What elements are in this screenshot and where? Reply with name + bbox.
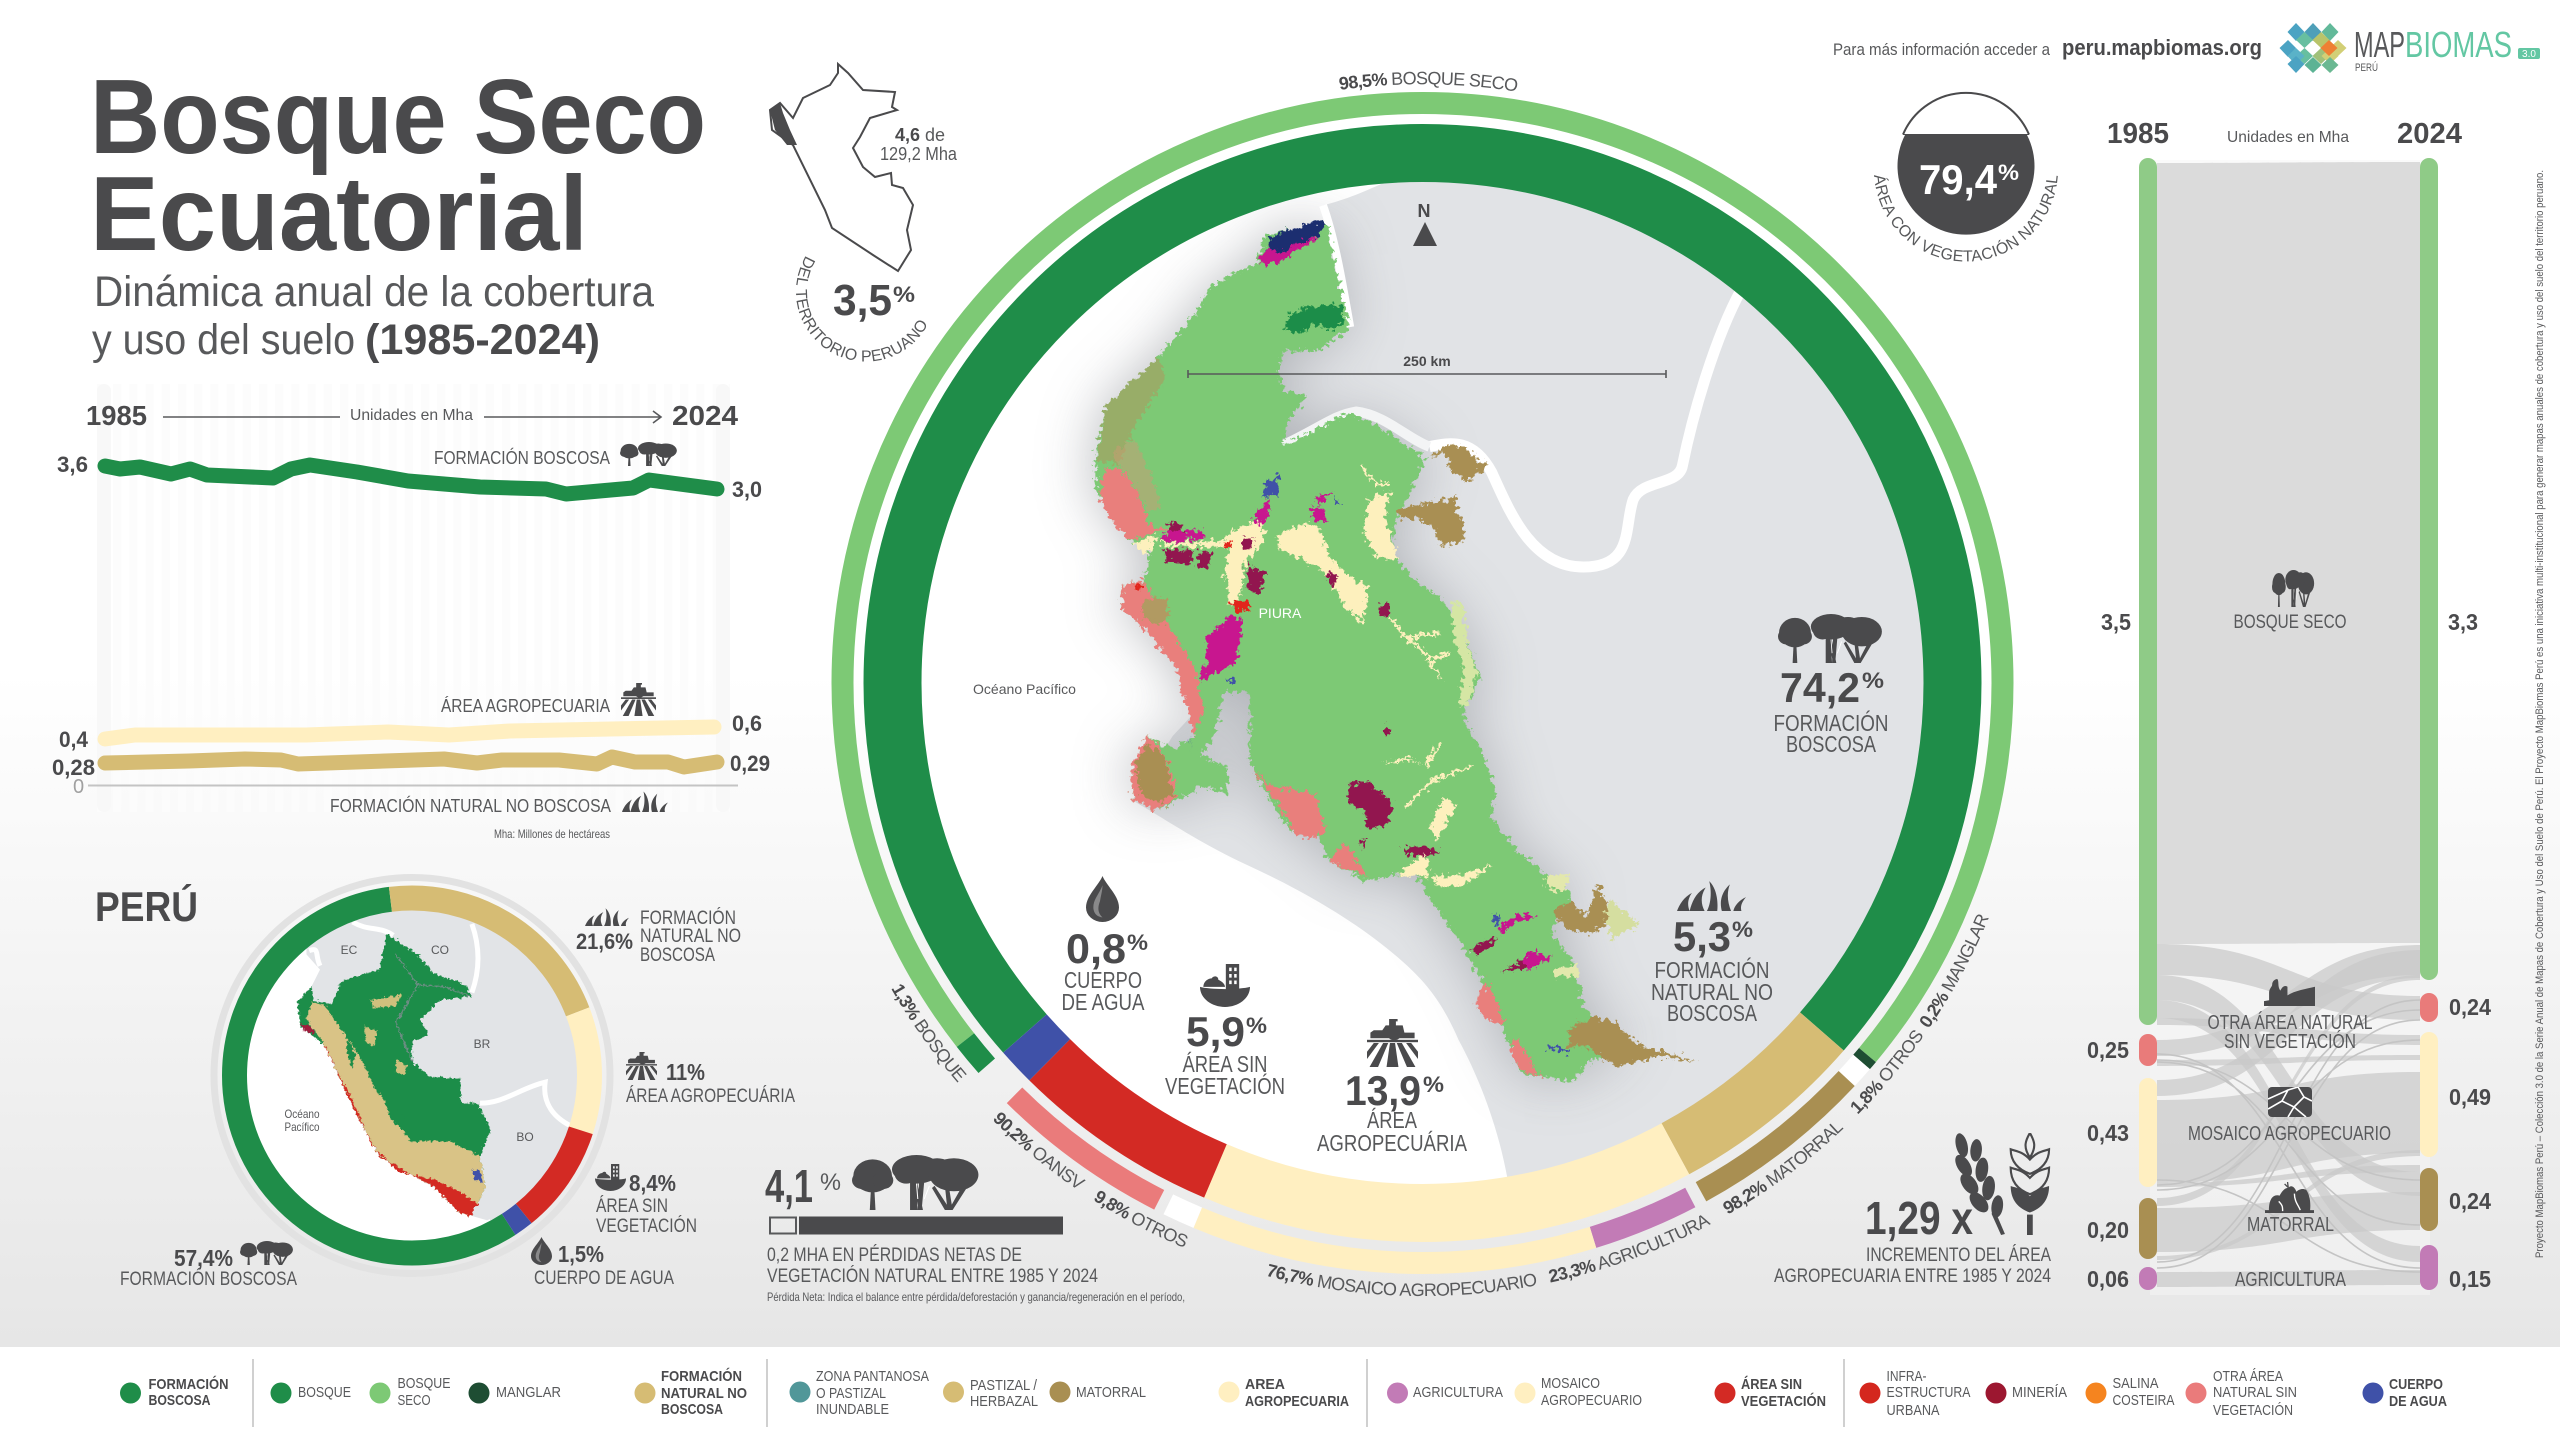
map labels: Océano Pacífico xyxy=(973,681,1076,697)
sankey header: 2024 xyxy=(2397,118,2462,150)
title: Bosque Seco xyxy=(90,58,706,176)
stat: formación boscosa 74,2% xyxy=(1774,614,1888,757)
subtitle xyxy=(92,268,654,364)
legend: salina costeira: SALINA xyxy=(2112,1375,2158,1392)
legend: cuerpo de agua xyxy=(2362,1376,2447,1410)
chart value labels: 0 xyxy=(73,776,84,798)
flow label: matorral xyxy=(2247,1182,2334,1236)
legend: formación natural no boscosa: NATURAL NO xyxy=(661,1385,747,1402)
curved label: ÁREA CON VEGETACIÓN NATURAL xyxy=(1874,175,2058,262)
label: formación boscosa: 57,4% xyxy=(174,1245,233,1271)
flow label: matorral: MATORRAL xyxy=(2247,1214,2334,1236)
flow label: bosque seco: BOSQUE SECO xyxy=(2234,612,2346,633)
chart value labels: 0,4 xyxy=(59,727,89,752)
label: formación natural no boscosa: FORMACIÓN xyxy=(640,907,736,929)
legend: minería: MINERÍA xyxy=(2012,1384,2067,1401)
legend: área agropecuaria: AGROPECUARIA xyxy=(1245,1393,1349,1410)
description: VEGETACIÓN NATURAL ENTRE 1985 Y 2024 xyxy=(767,1265,1098,1287)
map labels: Perú: Pacífico xyxy=(284,1120,320,1134)
outer ring: sub-clases xyxy=(842,103,2002,1263)
stat: área agropecuaria 13,9%: AGROPECUÁRIA xyxy=(1317,1130,1468,1156)
ring label: 1,8% otros: 1,8% OTROS xyxy=(1851,1030,1922,1114)
number: 4,1 xyxy=(765,1160,813,1212)
label: formación boscosa: FORMACIÓN BOSCOSA xyxy=(120,1268,297,1290)
chart header: Unidades en Mha xyxy=(350,407,473,424)
legend: área sin vegetación: ÁREA SIN xyxy=(1741,1376,1802,1393)
label: área agropecuaria: ÁREA AGROPECUÁRIA xyxy=(626,1086,795,1107)
chart value labels: 0,28 xyxy=(52,755,95,780)
sankey values: 0,24 xyxy=(2449,994,2491,1020)
stat: formación boscosa 74,2%: % xyxy=(1862,668,1884,693)
stat: cuerpo de agua 0,8% xyxy=(1062,876,1148,1015)
series label: área agropecuaria: ÁREA AGROPECUARIA xyxy=(441,696,610,716)
header info xyxy=(1833,35,2262,60)
stat: formación boscosa 74,2%: BOSCOSA xyxy=(1786,731,1877,757)
legend: zona pantanosa xyxy=(790,1368,929,1418)
legend: pastizal xyxy=(943,1377,1038,1410)
chart value labels: 3,0 xyxy=(732,477,762,502)
sankey header xyxy=(2107,118,2462,150)
chart header: 2024 xyxy=(672,400,738,431)
legend: infraestructura urbana xyxy=(1860,1368,1970,1419)
chart footnote: Mha: Millones de hectáreas xyxy=(494,827,610,841)
label: formación natural no boscosa: BOSCOSA xyxy=(640,945,715,966)
scale bar: 250 km xyxy=(1403,353,1451,369)
sankey values: 0,15 xyxy=(2449,1266,2491,1292)
label: área agropecuaria xyxy=(626,1052,795,1107)
chart header: 1985 xyxy=(86,400,147,431)
chart value labels: 0,29 xyxy=(730,751,770,776)
stat: 3,5%: 3,5 xyxy=(833,276,892,325)
badge: 79,4% área con vegetación natural: 79,4 xyxy=(1919,156,1998,203)
flow label: otra área natural xyxy=(2208,979,2372,1053)
legend: bosque seco xyxy=(370,1375,450,1409)
flow label: mosaico agropecuario xyxy=(2188,1087,2391,1145)
legend: matorral: MATORRAL xyxy=(1076,1384,1146,1401)
series label: formación boscosa xyxy=(434,442,677,468)
area text: 129,2 Mha xyxy=(880,144,958,164)
ring label: 9,8% otros: 9,8% OTROS xyxy=(1094,1190,1188,1246)
stat: área sin vegetación 5,9%: 5,9 xyxy=(1186,1008,1245,1055)
line: formación natural no boscosa xyxy=(105,757,717,767)
legend: minería xyxy=(1986,1382,2067,1404)
footer panel xyxy=(0,1347,2560,1438)
subtitle: Dinámica anual de la cobertura xyxy=(94,268,654,316)
panel: Perú xyxy=(95,871,795,1290)
panel: small Perú locator xyxy=(768,62,958,362)
map labels: Perú: BO xyxy=(516,1130,534,1144)
legend: agricultura: AGRICULTURA xyxy=(1413,1384,1503,1401)
label: formación boscosa xyxy=(120,1241,297,1290)
sankey values: 0,25 xyxy=(2087,1037,2129,1063)
legend: bosque seco: SECO xyxy=(398,1392,430,1409)
stat: formación natural no boscosa 5,3%: % xyxy=(1732,917,1753,942)
legend: área sin vegetación xyxy=(1714,1376,1826,1410)
flow label: agricultura: AGRICULTURA xyxy=(2235,1269,2347,1291)
stat: formación boscosa 74,2%: FORMACIÓN xyxy=(1774,710,1888,736)
series label: formación natural no boscosa: FORMACIÓN NATURAL NO BOSCOSA xyxy=(330,795,611,816)
sankey values xyxy=(2087,609,2491,1292)
stat: área agropecuaria 13,9%: ÁREA xyxy=(1367,1107,1418,1133)
scale bar xyxy=(1188,353,1666,378)
north arrow: N xyxy=(1418,201,1430,221)
map: Bosque Seco Ecuatorial xyxy=(1064,182,1924,1177)
stat: 3,5%: % xyxy=(893,282,915,307)
description: Pérdida Neta: Indica el balance entre pérdida/deforestación y ganancia/regeneración en el período, xyxy=(767,1290,1185,1304)
logo wordmark xyxy=(2354,24,2540,74)
map labels: Perú: CO xyxy=(431,943,449,957)
stat: incremento 1,29x: INCREMENTO DEL ÁREA xyxy=(1866,1245,2051,1266)
legend: zona pantanosa: ZONA PANTANOSA xyxy=(816,1368,929,1385)
legend: formación natural no boscosa xyxy=(634,1367,747,1418)
series label: área agropecuaria xyxy=(441,683,656,716)
stat: cuerpo de agua 0,8%: % xyxy=(1127,930,1148,955)
sankey values: 0,20 xyxy=(2087,1217,2129,1243)
logo mark xyxy=(2280,23,2346,73)
sankey values: 3,5 xyxy=(2101,609,2131,635)
curved label: del territorio peruano: DEL TERRITORIO PERUANO xyxy=(796,256,926,362)
chart value labels: 0,6 xyxy=(732,711,762,736)
legend: salina costeira xyxy=(2086,1375,2174,1409)
legend: pastizal: HERBAZAL xyxy=(970,1393,1038,1410)
legend: manglar xyxy=(468,1382,561,1404)
line chart: trends 1985-2024 xyxy=(52,384,770,841)
label: cuerpo de agua xyxy=(531,1237,674,1289)
flow label: otra área natural: SIN VEGETACIÓN xyxy=(2224,1030,2356,1053)
logo wordmark: BIOMAS xyxy=(2405,24,2512,65)
legend: otra área natural: VEGETACIÓN xyxy=(2213,1402,2293,1419)
number: % xyxy=(820,1169,841,1196)
label: formación natural no boscosa xyxy=(576,907,741,966)
stat: área agropecuaria 13,9%: 13,9 xyxy=(1345,1067,1421,1114)
ring label: 98,5% bosque seco: 98,5% BOSQUE SECO xyxy=(1339,72,1518,91)
legend: infraestructura urbana: ESTRUCTURA xyxy=(1886,1384,1970,1401)
sankey chart xyxy=(2087,118,2491,1295)
logo wordmark: PERÚ xyxy=(2355,61,2378,74)
map: Perú xyxy=(296,910,577,1220)
stat: formación natural no boscosa 5,3%: BOSCOSA xyxy=(1667,1000,1758,1026)
legend: pastizal: PASTIZAL / xyxy=(970,1377,1038,1394)
label: cuerpo de agua: CUERPO DE AGUA xyxy=(534,1268,674,1289)
legend: bosque: BOSQUE xyxy=(298,1384,351,1401)
legend: formación natural no boscosa: FORMACIÓN xyxy=(661,1367,742,1385)
chart value labels: 3,6 xyxy=(57,452,88,477)
area text xyxy=(880,125,958,164)
badge: 79,4% área con vegetación natural xyxy=(1874,92,2058,262)
legend: formación natural no boscosa: BOSCOSA xyxy=(661,1401,723,1418)
logo wordmark: MAP xyxy=(2354,24,2405,65)
legend: infraestructura urbana: INFRA- xyxy=(1886,1368,1926,1385)
stat: formación natural no boscosa 5,3%: NATURAL NO xyxy=(1651,979,1773,1005)
stat: formación boscosa 74,2%: 74,2 xyxy=(1780,664,1860,711)
area text: 4,6 de xyxy=(895,125,945,145)
ring label: 98,2% matorral: 98,2% MATORRAL xyxy=(1723,1124,1844,1214)
stat: área sin vegetación 5,9% xyxy=(1165,964,1285,1099)
stat: incremento 1,29x: AGROPECUARIA ENTRE 1985 Y 2024 xyxy=(1774,1266,2051,1287)
legend: cuerpo de agua: DE AGUA xyxy=(2389,1393,2447,1410)
badge: 79,4% área con vegetación natural: % xyxy=(1998,160,2019,185)
series label: formación boscosa: FORMACIÓN BOSCOSA xyxy=(434,447,610,468)
label: área sin vegetación: ÁREA SIN xyxy=(596,1196,668,1217)
loss bar xyxy=(770,1216,1063,1234)
icon: trees xyxy=(852,1155,978,1210)
legend: mosaico: AGROPECUARIO xyxy=(1541,1392,1642,1409)
map highlight xyxy=(770,103,797,145)
flow label: mosaico agropecuario: MOSAICO AGROPECUARIO xyxy=(2188,1123,2391,1145)
stat: incremento 1,29x xyxy=(1774,1132,2051,1287)
label: formación natural no boscosa: 21,6% xyxy=(576,929,633,954)
legend: zona pantanosa: O PASTIZAL xyxy=(816,1385,886,1402)
sankey values: 3,3 xyxy=(2448,609,2478,635)
sankey bars 2024 xyxy=(2420,158,2438,1290)
donut segments xyxy=(234,898,590,1253)
map labels: Perú xyxy=(284,943,534,1144)
legend: salina costeira: COSTEIRA xyxy=(2112,1392,2174,1409)
ring label: 0,2% manglar: 0,2% MANGLAR xyxy=(1920,914,1989,1027)
north arrow xyxy=(1413,201,1437,246)
legend: formación boscosa: FORMACIÓN xyxy=(148,1375,228,1393)
map labels: Perú: Océano xyxy=(284,1107,320,1121)
logo wordmark: 3.0 xyxy=(2522,49,2536,60)
legend: agricultura xyxy=(1387,1382,1503,1404)
stat: formación natural no boscosa 5,3% xyxy=(1651,881,1773,1026)
ring label: 23,3% agricultura: 23,3% AGRICULTURA xyxy=(1548,1215,1711,1282)
sankey bars 1985 xyxy=(2139,158,2157,1290)
icon: wheat xyxy=(1952,1132,2049,1235)
label: formación natural no boscosa: NATURAL NO xyxy=(640,926,741,947)
sankey values: 0,43 xyxy=(2087,1120,2129,1146)
stat: área sin vegetación 5,9%: VEGETACIÓN xyxy=(1165,1073,1285,1099)
stat: incremento 1,29x: 1,29 x xyxy=(1865,1192,1973,1244)
legend: infraestructura urbana: URBANA xyxy=(1886,1402,1940,1419)
legend: mosaico: MOSAICO xyxy=(1541,1375,1600,1392)
stat: formación natural no boscosa 5,3%: FORMACIÓN xyxy=(1654,957,1770,983)
donut: Perú xyxy=(210,874,614,1266)
inner ring: cobertura xyxy=(892,153,1952,1213)
chart value labels xyxy=(52,452,770,798)
label: área sin vegetación xyxy=(595,1164,697,1237)
main donut: Bosque Seco xyxy=(832,72,2014,1296)
sankey header: 1985 xyxy=(2107,118,2169,150)
ring label: 90,2% oansv: 90,2% OANSV xyxy=(994,1112,1086,1188)
legend: otra área natural: NATURAL SIN xyxy=(2213,1384,2297,1401)
legend: otra área natural: OTRA ÁREA xyxy=(2213,1368,2283,1385)
legend: bosque seco: BOSQUE xyxy=(398,1375,450,1392)
legend: manglar: MANGLAR xyxy=(496,1384,561,1401)
map labels: Perú: BR xyxy=(474,1037,491,1051)
sankey values: 0,06 xyxy=(2087,1266,2129,1292)
legend xyxy=(120,1359,2447,1427)
map labels xyxy=(973,605,1302,697)
stat: área sin vegetación 5,9%: ÁREA SIN xyxy=(1182,1051,1268,1077)
stat: cuerpo de agua 0,8%: CUERPO xyxy=(1064,967,1142,993)
legend: zona pantanosa: INUNDABLE xyxy=(816,1401,889,1418)
subtitle: (1985-2024) xyxy=(365,316,600,364)
stat: área agropecuaria 13,9% xyxy=(1317,1019,1468,1156)
line: formación boscosa xyxy=(105,465,717,494)
map outline: Perú xyxy=(770,64,913,271)
legend: área agropecuaria: AREA xyxy=(1245,1376,1285,1393)
heading: Perú: PERÚ xyxy=(95,882,198,930)
side credit text: Proyecto MapBiomas Perú – Colección 3.0 de la Serie Anual de Mapas de Cobertura y Uso del Suelo de Perú. El Proyecto MapBiomas Perú es una iniciativa multi-institucional para generar mapas anuales de cobertura y uso del suelo del territorio peruano. xyxy=(2534,170,2546,1258)
legend: matorral xyxy=(1050,1382,1146,1402)
legend: área agropecuaria xyxy=(1218,1376,1349,1410)
legend: mosaico xyxy=(1514,1375,1642,1409)
stat: cuerpo de agua 0,8%: 0,8 xyxy=(1066,925,1126,972)
map labels: PIURA xyxy=(1259,605,1302,621)
title xyxy=(90,58,706,273)
flow label: otra área natural: OTRA ÁREA NATURAL xyxy=(2208,1011,2372,1034)
title: Ecuatorial xyxy=(90,155,588,273)
description: 0,2 MHA EN PÉRDIDAS NETAS DE xyxy=(767,1245,1022,1266)
legend: formación boscosa: BOSCOSA xyxy=(148,1392,211,1409)
legend: otra área natural xyxy=(2186,1368,2297,1419)
stat: área agropecuaria 13,9%: % xyxy=(1423,1072,1444,1097)
stat: área sin vegetación 5,9%: % xyxy=(1246,1013,1267,1038)
subtitle: y uso del suelo xyxy=(92,316,355,364)
header info: Para más información acceder a xyxy=(1833,40,2050,59)
chart header xyxy=(86,400,738,431)
description xyxy=(767,1245,1185,1304)
sankey header: Unidades en Mha xyxy=(2227,129,2349,146)
legend: cuerpo de agua: CUERPO xyxy=(2389,1376,2443,1393)
sankey flows xyxy=(2157,162,2420,1287)
label: área sin vegetación: 8,4% xyxy=(629,1170,676,1196)
stat: cuerpo de agua 0,8%: DE AGUA xyxy=(1062,989,1145,1015)
sankey values: 0,49 xyxy=(2449,1084,2491,1110)
ring label: 1,3% bosque: 1,3% BOSQUE xyxy=(892,984,967,1082)
line: área agropecuaria xyxy=(105,727,714,739)
stat: formación natural no boscosa 5,3%: 5,3 xyxy=(1673,913,1731,960)
label: cuerpo de agua: 1,5% xyxy=(558,1241,604,1267)
header info: peru.mapbiomas.org xyxy=(2062,35,2262,60)
map labels: Perú: EC xyxy=(341,943,358,957)
label: área sin vegetación: VEGETACIÓN xyxy=(596,1215,697,1237)
sankey values: 0,24 xyxy=(2449,1188,2491,1214)
flow label: bosque seco xyxy=(2234,570,2346,633)
label: área agropecuaria: 11% xyxy=(666,1059,705,1085)
ring label: 76,7% mosaico: 76,7% MOSAICO AGROPECUARIO xyxy=(1268,1264,1536,1296)
logo: MapBiomas xyxy=(2280,23,2540,74)
legend: formación boscosa xyxy=(120,1375,228,1409)
stat: pérdida neta 4,1% xyxy=(765,1155,1185,1304)
legend: bosque xyxy=(270,1382,351,1404)
legend: área sin vegetación: VEGETACIÓN xyxy=(1741,1392,1826,1410)
